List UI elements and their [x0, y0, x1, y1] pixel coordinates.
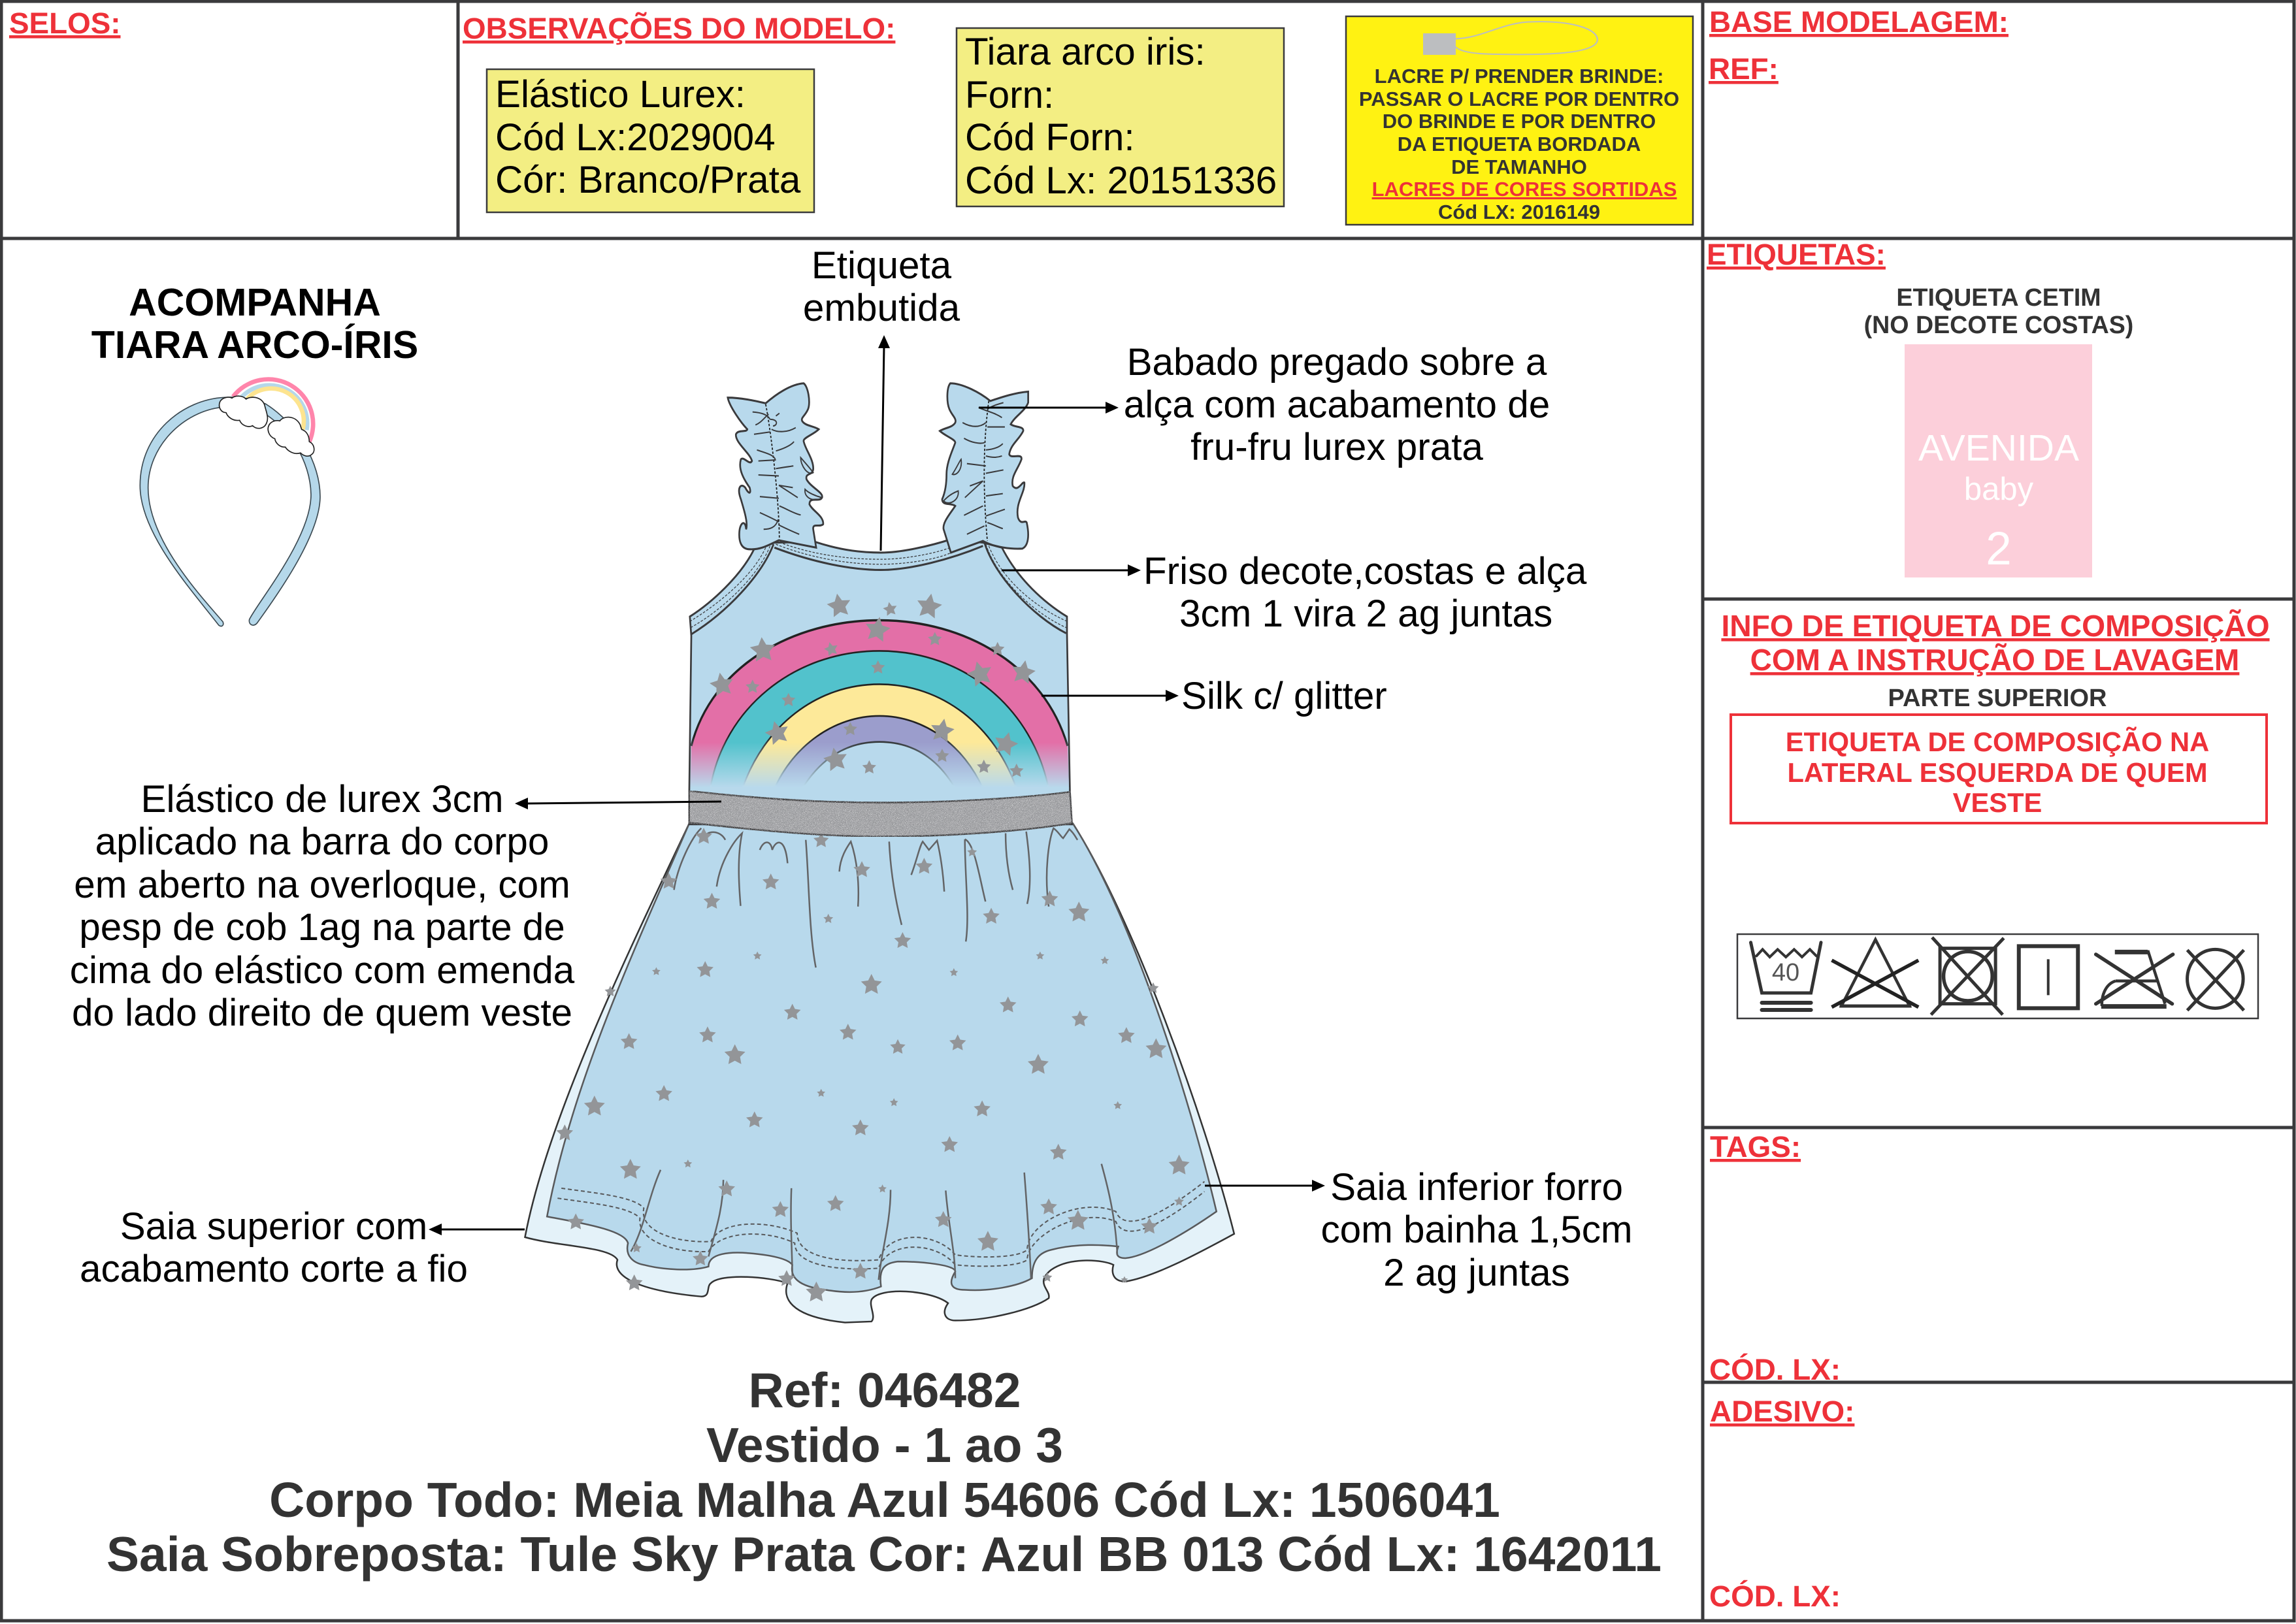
- annotation: silk glitter: [1041, 675, 1387, 717]
- annotation: saia inferior: 2 ag juntas: [1383, 1252, 1570, 1294]
- heading: tags: TAGS:: [1710, 1130, 1801, 1163]
- annotation: elástico de lurex: pesp de cob 1ag na parte de: [79, 906, 565, 949]
- dress: bodice and straps: [689, 383, 1072, 837]
- heading: adesivo: ADESIVO:: [1710, 1395, 1854, 1428]
- callout: etiqueta de composição: ETIQUETA DE COMPOSIÇÃO NA: [1786, 726, 2209, 757]
- panel: etiqueta cetim: ETIQUETA CETIM: [1896, 284, 2101, 311]
- annotation: elástico de lurex: [70, 778, 721, 1034]
- annotation: saia inferior: Saia inferior forro: [1330, 1166, 1623, 1209]
- title block: reference and materials: [107, 1363, 1662, 1582]
- annotation: friso decote: Friso decote,costas e alça: [1143, 550, 1587, 593]
- glitter elastic band: [689, 791, 1072, 837]
- note: tiara arco iris: [957, 28, 1284, 206]
- dress drawing: [525, 383, 1234, 1322]
- heading: info de etiqueta de composição: COM A INSTRUÇÃO DE LAVAGEM: [1750, 643, 2239, 677]
- note: elástico lurex: [487, 69, 814, 212]
- bodice stars: [708, 591, 1037, 777]
- annotation: friso decote: 3cm 1 vira 2 ag juntas: [1179, 593, 1552, 635]
- panel: etiqueta cetim: (NO DECOTE COSTAS): [1864, 311, 2133, 338]
- note: lacre para prender brinde: DE TAMANHO: [1451, 155, 1587, 178]
- text: cód lx adesivo: CÓD. LX:: [1709, 1579, 1841, 1613]
- heading: observações do modelo: OBSERVAÇÕES DO MODELO:: [463, 11, 895, 45]
- annotation: silk glitter: Silk c/ glitter: [1181, 675, 1387, 717]
- title block: reference and materials: Vestido - 1 ao 3: [706, 1418, 1063, 1472]
- bodice: [689, 540, 1072, 824]
- annotation: etiqueta embutida: Etiqueta: [812, 244, 952, 287]
- note: elástico lurex: Cód Lx:2029004: [495, 116, 776, 159]
- annotation: babado: [979, 341, 1550, 468]
- annotation: babado: fru-fru lurex prata: [1190, 426, 1483, 468]
- strap left: [728, 383, 823, 549]
- title block: reference and materials: Saia Sobreposta: Tule Sky Prata Cor: Azul BB 013 Cód Lx: 1642011: [107, 1527, 1662, 1582]
- label: avenida baby: AVENIDA: [1918, 427, 2079, 469]
- note: elástico lurex: Cór: Branco/Prata: [495, 159, 801, 201]
- icon: rainbow headband: [140, 380, 320, 626]
- icons: care symbols: 40: [1772, 959, 1799, 986]
- callout: etiqueta de composição: VESTE: [1953, 787, 2042, 818]
- label: avenida baby: [1905, 344, 2092, 577]
- text: cód lx tags: CÓD. LX:: [1709, 1352, 1841, 1386]
- note: tiara arco iris: Tiara arco iris:: [965, 31, 1205, 73]
- callout: etiqueta de composição: LATERAL ESQUERDA DE QUEM: [1787, 757, 2208, 788]
- heading: etiquetas: ETIQUETAS:: [1707, 238, 1886, 271]
- annotation: etiqueta embutida: [803, 244, 960, 551]
- heading: info de etiqueta de composição: INFO DE ETIQUETA DE COMPOSIÇÃO: [1721, 609, 2270, 643]
- text: parte superior: PARTE SUPERIOR: [1888, 685, 2107, 712]
- annotation: babado: alça com acabamento de: [1124, 383, 1550, 426]
- annotation: elástico de lurex: aplicado na barra do corpo: [95, 820, 549, 863]
- heading: acompanha tiara: [91, 281, 418, 366]
- panel: etiqueta cetim: [1864, 284, 2133, 577]
- annotation: saia inferior: [1205, 1166, 1633, 1294]
- heading: acompanha tiara: ACOMPANHA: [129, 281, 381, 324]
- strap right: [940, 383, 1028, 553]
- label: avenida baby: baby: [1964, 472, 2034, 507]
- heading: base modelagem: BASE MODELAGEM:: [1709, 5, 2009, 39]
- note: tiara arco iris: Forn:: [965, 74, 1054, 116]
- title block: reference and materials: Corpo Todo: Meia Malha Azul 54606 Cód Lx: 1506041: [269, 1472, 1500, 1527]
- annotation: saia inferior: com bainha 1,5cm: [1320, 1209, 1633, 1251]
- note: tiara arco iris: Cód Forn:: [965, 116, 1135, 159]
- note: lacre para prender brinde: [1346, 16, 1693, 225]
- note: lacre para prender brinde: DO BRINDE E POR DENTRO: [1383, 110, 1656, 133]
- icon: lacre seal: [1423, 22, 1598, 55]
- title block: reference and materials: Ref: 046482: [749, 1363, 1021, 1418]
- dress: skirt: [525, 823, 1234, 1322]
- note: lacre para prender brinde: LACRES DE CORES SORTIDAS: [1372, 178, 1677, 201]
- annotation: saia superior: acabamento corte a fio: [80, 1248, 468, 1290]
- annotation: friso decote: [1002, 550, 1587, 635]
- note: elástico lurex: Elástico Lurex:: [495, 73, 746, 116]
- rainbow print: [691, 620, 1069, 788]
- heading: acompanha tiara: TIARA ARCO-ÍRIS: [91, 323, 418, 366]
- note: lacre para prender brinde: LACRE P/ PRENDER BRINDE:: [1375, 65, 1664, 88]
- annotation: saia superior: Saia superior com: [120, 1205, 427, 1248]
- heading: info de etiqueta de composição: [1721, 609, 2270, 677]
- note: lacre para prender brinde: DA ETIQUETA BORDADA: [1398, 133, 1641, 155]
- note: tiara arco iris: Cód Lx: 20151336: [965, 159, 1277, 202]
- annotation: elástico de lurex: em aberto na overloque, com: [74, 864, 570, 906]
- note: lacre para prender brinde: Cód LX: 2016149: [1438, 201, 1600, 223]
- callout: etiqueta de composição: [1731, 715, 2267, 823]
- annotation: elástico de lurex: Elástico de lurex 3cm: [141, 778, 503, 820]
- annotation: saia superior: [80, 1205, 525, 1290]
- annotation: babado: Babado pregado sobre a: [1127, 341, 1547, 383]
- annotation: elástico de lurex: do lado direito de quem veste: [72, 992, 572, 1034]
- icons: care symbols: [1737, 934, 2258, 1018]
- annotation: etiqueta embutida: embutida: [803, 287, 960, 329]
- heading: selos: SELOS:: [9, 7, 120, 40]
- note: lacre para prender brinde: PASSAR O LACRE POR DENTRO: [1359, 88, 1679, 110]
- label: avenida baby: 2: [1986, 523, 2012, 575]
- annotation: elástico de lurex: cima do elástico com emenda: [70, 949, 575, 992]
- heading: ref: REF:: [1709, 52, 1779, 86]
